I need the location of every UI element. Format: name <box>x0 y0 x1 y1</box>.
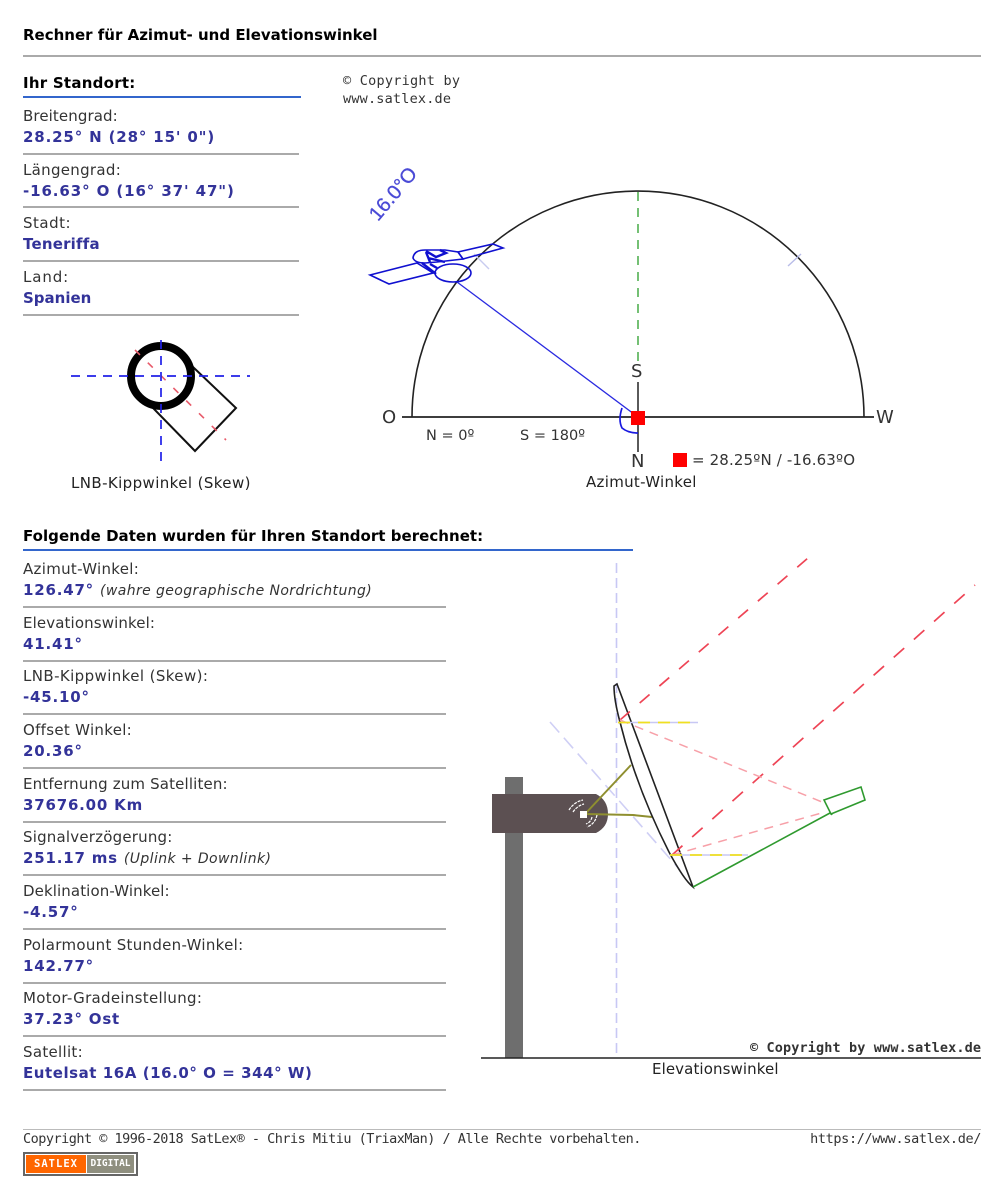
row: Skew: -45.10° <box>23 688 90 706</box>
panel: results <box>23 560 446 1091</box>
panel: location data <box>23 107 299 316</box>
row: Skew: LNB-Kippwinkel (Skew): <box>23 667 208 685</box>
row: Azimut <box>23 560 446 608</box>
row: Stadt: Stadt: <box>23 214 71 232</box>
diagram: azimuth: N = 0º <box>426 428 474 444</box>
row: Offset: 20.36° <box>23 742 83 760</box>
row: Polarmount <box>23 936 446 984</box>
row: Motor: Motor-Gradeinstellung: <box>23 989 202 1007</box>
diagram: azimuth: W <box>876 407 894 428</box>
row: Land <box>23 268 299 316</box>
row: Polarmount: Polarmount Stunden-Winkel: <box>23 936 243 954</box>
diagram: azimuth: N <box>631 451 644 472</box>
row: Breitengrad: Breitengrad: <box>23 107 118 125</box>
footer <box>23 1129 981 1176</box>
row: Offset: Offset Winkel: <box>23 721 132 739</box>
footer: https://www.satlex.de/ <box>810 1131 981 1147</box>
row: Längengrad <box>23 161 299 208</box>
logo: SatLex Digital: SATLEX <box>34 1158 78 1170</box>
row: Land: Land: <box>23 268 69 286</box>
logo: SatLex Digital <box>23 1152 138 1176</box>
caption: azimuth: Azimut-Winkel <box>586 473 697 491</box>
row: Signal: Signalverzögerung: <box>23 828 173 846</box>
row: Offset <box>23 721 446 769</box>
footer: Copyright © 1996-2018 SatLex® - Chris Mitiu (TriaxMan) / Alle Rechte vorbehalten. <box>23 1131 641 1147</box>
diagram: azimuth <box>343 73 894 472</box>
diagram: elevation: © Copyright by www.satlex.de <box>750 1040 981 1056</box>
row: Satellit: Satellit: <box>23 1043 83 1061</box>
row: Deklination: -4.57° <box>23 903 79 921</box>
diagram: azimuth: = 28.25ºN / -16.63ºO <box>692 451 855 469</box>
row: Entfernung <box>23 775 446 823</box>
row: Land: Spanien <box>23 289 91 307</box>
row: Signal: 251.17 ms (Uplink + Downlink) <box>23 849 271 867</box>
caption: skew: LNB-Kippwinkel (Skew) <box>71 474 251 492</box>
row: Breitengrad: 28.25° N (28° 15' 0") <box>23 128 215 146</box>
diagram: azimuth: www.satlex.de <box>343 91 451 107</box>
row: Deklination: Deklination-Winkel: <box>23 882 170 900</box>
row: Azimut: 126.47° (wahre geographische Nordrichtung) <box>23 581 372 599</box>
row: Motor: 37.23° Ost <box>23 1010 120 1028</box>
row: Signal <box>23 828 446 876</box>
heading: Ihr Standort: Ihr Standort: <box>23 74 136 92</box>
row: Entfernung: 37676.00 Km <box>23 796 143 814</box>
row: Elevation: Elevationswinkel: <box>23 614 155 632</box>
row: Skew <box>23 667 446 715</box>
row: Längengrad: Längengrad: <box>23 161 121 179</box>
row: Breitengrad <box>23 107 299 155</box>
row: Stadt <box>23 214 299 262</box>
diagram: azimuth: © Copyright by <box>343 73 460 89</box>
diagram: azimuth: 16.0°O <box>365 163 422 225</box>
row: Deklination <box>23 882 446 930</box>
caption: elevation: Elevationswinkel <box>652 1060 779 1078</box>
icon: satellite <box>370 244 503 284</box>
row: Satellit <box>23 1043 446 1091</box>
row: Elevation: 41.41° <box>23 635 83 653</box>
row: Polarmount: 142.77° <box>23 957 94 975</box>
row: Entfernung: Entfernung zum Satelliten: <box>23 775 228 793</box>
row: Motor <box>23 989 446 1037</box>
diagram: azimuth: S = 180º <box>520 428 585 444</box>
row: Azimut: Azimut-Winkel: <box>23 560 139 578</box>
row: Elevation <box>23 614 446 662</box>
diagram: azimuth: S <box>631 361 642 382</box>
title: Rechner für Azimut- und Elevationswinkel <box>23 26 378 44</box>
row: Längengrad: -16.63° O (16° 37' 47") <box>23 182 235 200</box>
row: Satellit: Eutelsat 16A (16.0° O = 344° W) <box>23 1064 312 1082</box>
row: Stadt: Teneriffa <box>23 235 100 253</box>
logo: SatLex Digital: DIGITAL <box>90 1158 131 1169</box>
diagram: azimuth: O <box>382 407 396 428</box>
diagram: LNB skew <box>71 340 250 461</box>
heading: calculated data: Folgende Daten wurden für Ihren Standort berechnet: <box>23 527 483 545</box>
